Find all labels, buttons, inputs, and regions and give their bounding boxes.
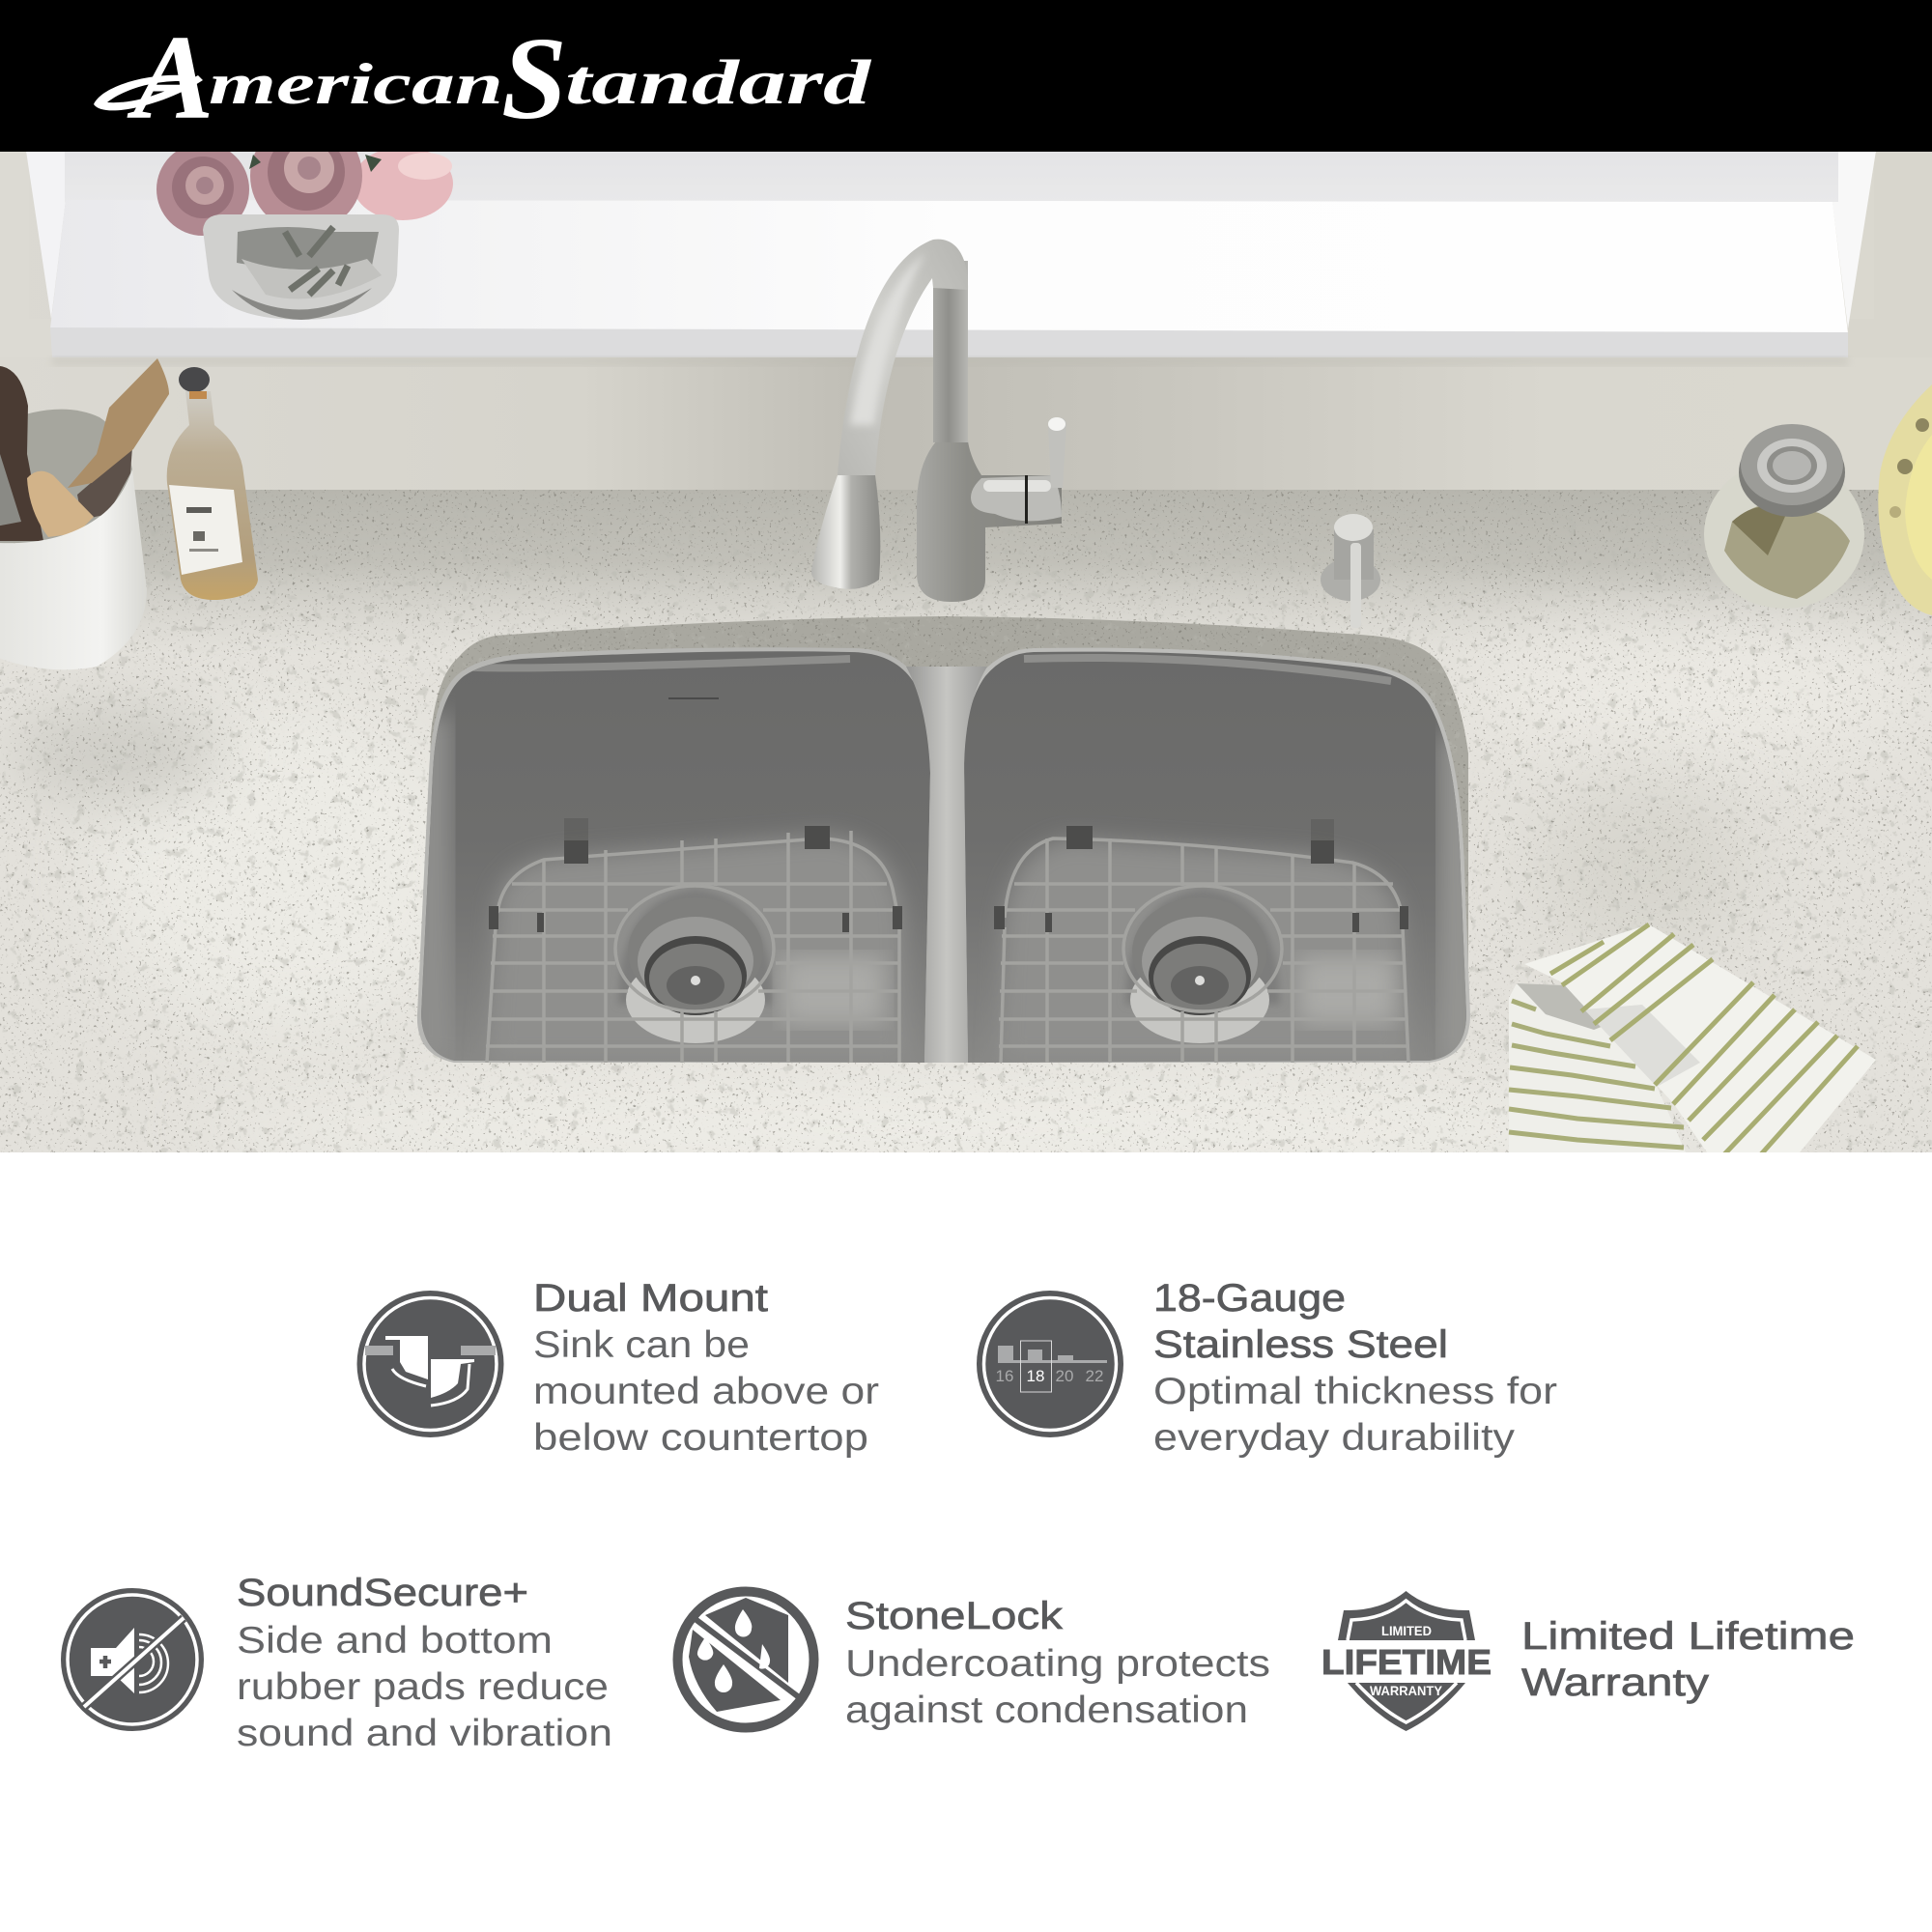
dish towel — [1509, 924, 1876, 1154]
brand logo: A — [133, 12, 213, 145]
wooden utensils — [0, 358, 169, 541]
lever cap — [1048, 417, 1065, 431]
feature: soundsecure+ — [61, 1572, 612, 1754]
icon: warranty shield — [1321, 1591, 1492, 1731]
spout highlight — [850, 253, 925, 425]
icon: stone and water drops — [678, 1592, 813, 1727]
towel upper fold — [1524, 924, 1876, 1152]
counter speckle texture — [0, 490, 1932, 1152]
center divider — [906, 667, 987, 1063]
description: rubber pads reduce — [237, 1666, 609, 1708]
description: Undercoating protects — [845, 1643, 1270, 1685]
drain: left — [626, 917, 765, 1043]
rack clips: right — [994, 819, 1408, 932]
backsplash wall — [0, 152, 1932, 492]
description: Sink can be — [533, 1324, 750, 1366]
icon: gauge chart: 22 — [1086, 1367, 1103, 1385]
brand logo — [94, 12, 871, 145]
lever handle — [1048, 417, 1066, 488]
description — [1153, 1371, 1557, 1459]
description — [533, 1324, 879, 1459]
window sill — [0, 151, 1932, 366]
engraved logo mark — [668, 697, 719, 699]
brand logo: merican — [209, 52, 503, 116]
basin: right — [959, 648, 1478, 1063]
icon: gauge chart — [977, 1291, 1123, 1437]
yellow jar — [1878, 384, 1932, 615]
header bar — [0, 0, 1932, 152]
heading — [1153, 1277, 1448, 1366]
heading: StoneLock — [845, 1595, 1064, 1637]
glass vase — [203, 214, 399, 320]
heading: Stainless Steel — [1153, 1323, 1448, 1366]
basin: left — [411, 647, 935, 1063]
icon: dual mount — [357, 1291, 504, 1437]
description: mounted above or — [533, 1371, 879, 1412]
faucet hub — [971, 475, 1062, 521]
heading: 18-Gauge — [1153, 1277, 1346, 1320]
drain: right — [1130, 917, 1269, 1043]
icon: warranty shield: WARRANTY — [1370, 1683, 1443, 1698]
pull-down spray head — [811, 475, 880, 589]
rack clips: left — [489, 818, 902, 932]
heading: Limited Lifetime — [1521, 1615, 1855, 1658]
wire rack: left — [486, 831, 899, 1063]
countertop — [0, 490, 1932, 1179]
sink rim — [430, 616, 1468, 964]
towel lower layer — [1509, 983, 1686, 1152]
brand logo: tandard — [565, 47, 871, 118]
description: sound and vibration — [237, 1713, 612, 1754]
brand logo: S — [501, 14, 567, 144]
description: Optimal thickness for — [1153, 1371, 1557, 1412]
heading — [1521, 1615, 1855, 1704]
feature: stonelock — [678, 1592, 1270, 1731]
icon: gauge chart: 18 — [1027, 1367, 1044, 1385]
bottle — [167, 367, 258, 600]
faucet neck — [933, 261, 968, 442]
heading: Dual Mount — [533, 1277, 768, 1320]
description: against condensation — [845, 1690, 1248, 1731]
icon: gauge chart: 20 — [1056, 1367, 1073, 1385]
glass jar with lid — [1704, 424, 1864, 609]
heading: Warranty — [1521, 1662, 1709, 1704]
photo: kitchen sink scene — [0, 120, 1932, 1179]
faucet — [811, 240, 1066, 602]
flowers — [156, 152, 453, 236]
crock front — [0, 469, 147, 669]
feature: limited lifetime warranty — [1321, 1591, 1855, 1731]
description — [237, 1620, 612, 1754]
icon: warranty shield: LIMITED — [1381, 1623, 1432, 1638]
faucet body — [917, 441, 1062, 602]
icon: warranty shield: LIFETIME — [1321, 1642, 1492, 1682]
feature: 18-gauge stainless steel — [977, 1277, 1557, 1459]
feature: dual mount — [357, 1277, 879, 1459]
utensil crock — [0, 358, 169, 669]
wire rack: right — [999, 838, 1408, 1063]
icon: muted speaker — [61, 1588, 204, 1731]
description: below countertop — [533, 1417, 868, 1459]
hub black ring — [1025, 475, 1028, 524]
crock interior — [0, 410, 132, 543]
spout arch — [838, 240, 968, 475]
description: Side and bottom — [237, 1620, 553, 1662]
hub highlight — [983, 480, 1051, 492]
description: everyday durability — [1153, 1417, 1516, 1459]
icon: gauge chart: 16 — [996, 1367, 1013, 1385]
description — [845, 1643, 1270, 1731]
heading: SoundSecure+ — [237, 1572, 528, 1614]
soap dispenser — [1321, 514, 1380, 628]
